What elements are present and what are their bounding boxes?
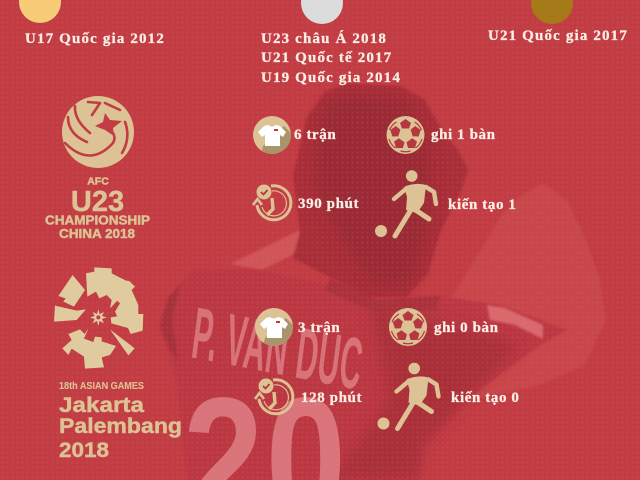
goals: ghi 0 bàn bbox=[434, 320, 499, 336]
bronze medal bbox=[531, 0, 573, 24]
icon: kicker bbox=[375, 170, 436, 237]
logo: Asian Games Jakarta Palembang: 2018 bbox=[59, 439, 109, 462]
icon: shirt bbox=[255, 308, 299, 351]
minutes: 390 phút bbox=[298, 196, 359, 212]
assists: kiến tạo 0 bbox=[451, 390, 520, 406]
logo: Asian Games Jakarta Palembang: 18th ASIAN GAMES bbox=[59, 381, 144, 392]
player photo bbox=[160, 84, 606, 480]
silver caption bbox=[261, 30, 401, 86]
neck and shoulder skin bbox=[230, 230, 302, 270]
jersey back bbox=[450, 298, 566, 397]
jersey shading right bbox=[340, 312, 514, 480]
icon: clock bbox=[255, 378, 293, 414]
silver caption: U23 châu Á 2018 bbox=[261, 30, 387, 47]
silver caption: U19 Quốc gia 2014 bbox=[261, 70, 401, 86]
silver medal bbox=[301, 0, 343, 24]
head core shadow bbox=[315, 95, 430, 285]
icon: clock bbox=[253, 184, 291, 220]
stats: U23 championship bbox=[253, 116, 517, 237]
gold medal bbox=[19, 0, 61, 23]
icon: ball bbox=[389, 308, 427, 346]
matches: 6 trận bbox=[294, 127, 336, 143]
matches: 3 trận bbox=[298, 320, 340, 336]
icon: kicker bbox=[378, 363, 438, 430]
silver caption: U21 Quốc tế 2017 bbox=[261, 50, 392, 66]
icon: shirt bbox=[253, 116, 297, 159]
gold caption: U17 Quốc gia 2012 bbox=[25, 31, 165, 47]
assists: kiến tạo 1 bbox=[448, 197, 517, 213]
cuff bbox=[487, 305, 543, 339]
logo: Asian Games Jakarta Palembang: Jakarta bbox=[59, 394, 144, 417]
stats: Asian Games bbox=[255, 308, 520, 430]
head bbox=[293, 84, 468, 297]
icon: ball bbox=[386, 116, 424, 154]
logo: AFC U23 Championship: U23 bbox=[71, 186, 124, 218]
collar bbox=[325, 278, 440, 312]
goals: ghi 1 bàn bbox=[431, 127, 496, 143]
jersey name: P. VAN DUC bbox=[188, 292, 367, 405]
minutes: 128 phút bbox=[301, 390, 362, 406]
logo: AFC U23 Championship bbox=[45, 96, 150, 241]
bronze caption: U21 Quốc gia 2017 bbox=[488, 28, 628, 44]
sleeve seam left bbox=[160, 285, 180, 360]
emblem bbox=[62, 96, 134, 168]
logo: Asian Games Jakarta Palembang bbox=[54, 267, 182, 462]
emblem bbox=[54, 267, 143, 369]
logo: AFC U23 Championship: AFC bbox=[87, 176, 109, 188]
logo: AFC U23 Championship: CHAMPIONSHIP bbox=[45, 214, 150, 228]
logo: AFC U23 Championship: CHINA 2018 bbox=[59, 227, 135, 241]
logo: Asian Games Jakarta Palembang: Palembang bbox=[59, 415, 182, 438]
raised arm bbox=[450, 183, 606, 400]
